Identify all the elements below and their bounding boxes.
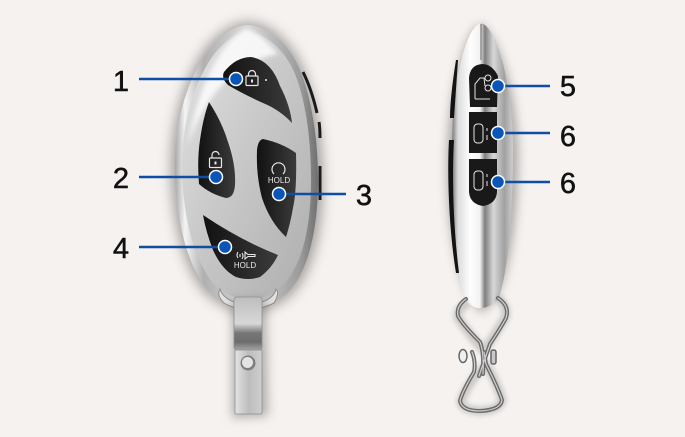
clip pin right: [491, 350, 496, 364]
clip shadow: [458, 300, 506, 411]
top highlight: [188, 29, 278, 145]
icon: lock: [246, 71, 258, 86]
callout 6 upper: [492, 121, 576, 153]
button 2: unlock: [198, 102, 235, 198]
icon: horn: [237, 252, 255, 259]
icon: remote start: [272, 163, 285, 174]
callout 1: [113, 66, 242, 98]
button 5: power doors: [469, 64, 498, 107]
number 3: 3: [356, 180, 372, 212]
fob outer shell: [175, 25, 318, 309]
callout 5: [492, 71, 576, 103]
button 6 upper: [469, 112, 497, 153]
strap lower: [235, 350, 262, 414]
icon: vehicle: [475, 75, 491, 99]
number 4: 4: [113, 233, 129, 265]
strap shadow: [232, 300, 268, 418]
carabiner clip: [458, 298, 507, 411]
left edge dark buttons: [448, 60, 459, 273]
clip pin left: [459, 350, 467, 362]
number 5: 5: [560, 71, 576, 103]
button 3: remote start hold: [257, 139, 296, 237]
key strap: [232, 297, 268, 418]
button 6 lower: [469, 159, 497, 206]
fob shadow: [171, 22, 323, 313]
callout 3: [272, 180, 372, 212]
clip upper wire: [458, 298, 507, 376]
number 6: 6: [560, 121, 576, 153]
fob inner face: [182, 33, 311, 300]
callout 2: [113, 163, 222, 195]
key ring slot: [219, 289, 278, 309]
icon: sliding door: [474, 124, 487, 143]
front view of key fob: [171, 22, 323, 313]
number 6: 6: [560, 168, 576, 200]
side shadow: [447, 24, 518, 312]
side buttons on fob edge: [303, 72, 320, 200]
icon: unlock: [210, 152, 222, 168]
top center ridge: [480, 24, 482, 60]
strap rivet: [240, 356, 256, 370]
clip lower wire: [460, 352, 502, 411]
label: HOLD: HOLD: [234, 261, 256, 270]
strap upper: [234, 297, 262, 350]
callout 6 lower: [492, 168, 576, 200]
number 1: 1: [113, 66, 129, 98]
icon: sliding door: [474, 171, 487, 190]
number 2: 2: [113, 163, 129, 195]
button 1: lock: [223, 57, 292, 123]
button 4: panic hold: [203, 215, 278, 279]
label: HOLD: HOLD: [268, 176, 290, 185]
side view of key fob: [447, 23, 518, 312]
callout 4: [113, 233, 232, 265]
side body: [452, 23, 513, 308]
